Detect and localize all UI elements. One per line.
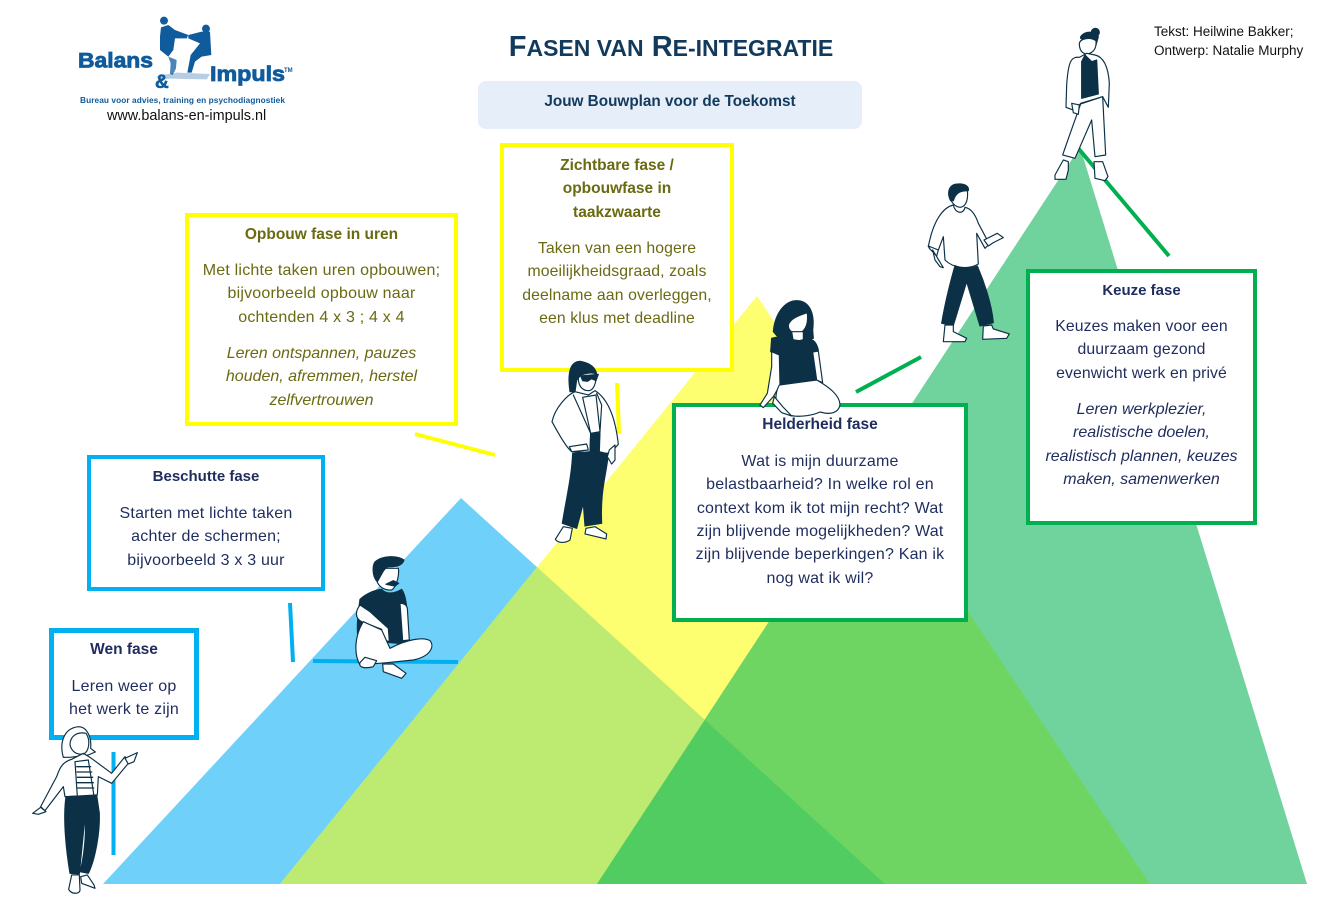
logo tagline: Bureau voor advies, training en psychodiagnostiek: [80, 95, 285, 105]
mountain: green: [597, 147, 1307, 884]
heading: wen fase: Wen fase: [90, 641, 158, 658]
text: zichtbare fase: moeilijkheidsgraad, zoals: [528, 263, 706, 280]
text: beschutte fase: bijvoorbeeld 3 x 3 uur: [127, 552, 285, 569]
figure: woman pointing: [33, 727, 137, 893]
logo trademark: TM: [284, 68, 293, 74]
connector: beschutte fase: [290, 603, 293, 662]
text: beschutte fase: achter de schermen;: [131, 528, 281, 545]
learning points: keuze fase: maken, samenwerken: [1063, 471, 1220, 488]
title: FASEN VAN RE-INTEGRATIE: [509, 31, 833, 63]
learning points: opbouw fase: zelfvertrouwen: [269, 392, 374, 409]
text: helderheid fase: belastbaarheid? In welke rol en: [706, 476, 934, 493]
connector: zichtbare fase: [617, 383, 619, 433]
text: keuze fase: duurzaam gezond: [1078, 341, 1205, 358]
logo word: Impuls: Impuls: [210, 63, 285, 86]
panel: keuze fase: [1026, 269, 1257, 525]
text: keuze fase: evenwicht werk en privé: [1056, 365, 1227, 382]
learning points: keuze fase: [1045, 401, 1238, 488]
credits: [1154, 24, 1304, 58]
subtitle panel: [478, 81, 862, 129]
connector: keuze fase: [1078, 148, 1169, 256]
figure: man sitting cross-legged: [356, 557, 432, 678]
credits: Ontwerp: Natalie Murphy: [1154, 43, 1303, 58]
text: zichtbare fase: deelname aan overleggen,: [522, 287, 712, 304]
connector: beschutte ground: [313, 661, 458, 662]
heading: helderheid fase: Helderheid fase: [762, 416, 878, 433]
panel: wen fase: [49, 628, 199, 740]
heading: zichtbare fase: Zichtbare fase /: [560, 157, 674, 174]
heading: zichtbare fase: [560, 157, 674, 221]
panel: opbouw fase: [185, 213, 458, 426]
learning points: opbouw fase: Leren ontspannen, pauzes: [227, 345, 416, 362]
figure: woman on the summit: [1055, 28, 1109, 181]
text: zichtbare fase: [522, 240, 712, 327]
heading: opbouw fase: Opbouw fase in uren: [245, 226, 398, 243]
connector: helderheid fase: [856, 357, 921, 392]
text: helderheid fase: context kom ik tot mijn recht? Wat: [697, 500, 943, 517]
panel: zichtbare fase: [500, 143, 734, 372]
text: helderheid fase: zijn blijvende beperkingen? Kan ik: [696, 546, 944, 563]
logo website: www.balans-en-impuls.nl: [106, 108, 266, 124]
heading: zichtbare fase: opbouwfase in: [563, 180, 671, 197]
heading: keuze fase: Keuze fase: [1102, 282, 1181, 299]
figure: woman kneeling: [760, 301, 840, 416]
heading: zichtbare fase: taakzwaarte: [573, 204, 661, 221]
overlap: yellow and green: [597, 466, 1150, 884]
text: helderheid fase: [696, 453, 944, 587]
overlap: blue and yellow: [280, 567, 885, 884]
text: helderheid fase: Wat is mijn duurzame: [741, 453, 899, 470]
figure: woman with sunglasses: [552, 361, 618, 542]
text: wen fase: [69, 678, 179, 718]
mountain: blue: [103, 498, 885, 884]
text: beschutte fase: Starten met lichte taken: [120, 505, 292, 522]
figure: man walking: [928, 184, 1009, 342]
heading: beschutte fase: Beschutte fase: [153, 468, 259, 485]
text: opbouw fase: ochtenden 4 x 3 ; 4 x 4: [238, 309, 405, 326]
learning points: keuze fase: Leren werkplezier,: [1077, 401, 1206, 418]
text: opbouw fase: [203, 262, 440, 326]
logo word: Balans: Balans: [78, 50, 153, 72]
mountain: yellow: [280, 296, 1150, 884]
overlap: all three: [597, 720, 885, 884]
text: wen fase: het werk te zijn: [69, 701, 179, 718]
text: helderheid fase: nog wat ik wil?: [766, 570, 874, 587]
connector: opbouw fase: [415, 434, 495, 455]
subtitle panel: Jouw Bouwplan voor de Toekomst: [544, 93, 796, 110]
learning points: opbouw fase: [226, 345, 418, 409]
panel: helderheid fase: [672, 403, 968, 622]
text: beschutte fase: [120, 505, 292, 569]
learning points: keuze fase: realistisch plannen, keuzes: [1045, 448, 1238, 465]
text: keuze fase: [1055, 318, 1228, 382]
logo figures: [157, 17, 211, 80]
text: helderheid fase: zijn blijvende mogelijkheden? Wat: [696, 523, 944, 540]
text: zichtbare fase: Taken van een hogere: [538, 240, 696, 257]
panel: beschutte fase: [87, 455, 325, 591]
logo ampersand: &: [155, 72, 169, 93]
text: wen fase: Leren weer op: [72, 678, 176, 695]
text: opbouw fase: bijvoorbeeld opbouw naar: [227, 285, 416, 302]
learning points: keuze fase: realistische doelen,: [1073, 424, 1210, 441]
text: zichtbare fase: een klus met deadline: [539, 310, 695, 327]
learning points: opbouw fase: houden, afremmen, herstel: [226, 368, 417, 385]
logo: Balans & Impuls: [78, 16, 293, 124]
text: keuze fase: Keuzes maken voor een: [1055, 318, 1228, 335]
credits: Tekst: Heilwine Bakker;: [1154, 24, 1294, 39]
connector: wen fase: [112, 752, 116, 855]
text: opbouw fase: Met lichte taken uren opbouwen;: [203, 262, 440, 279]
